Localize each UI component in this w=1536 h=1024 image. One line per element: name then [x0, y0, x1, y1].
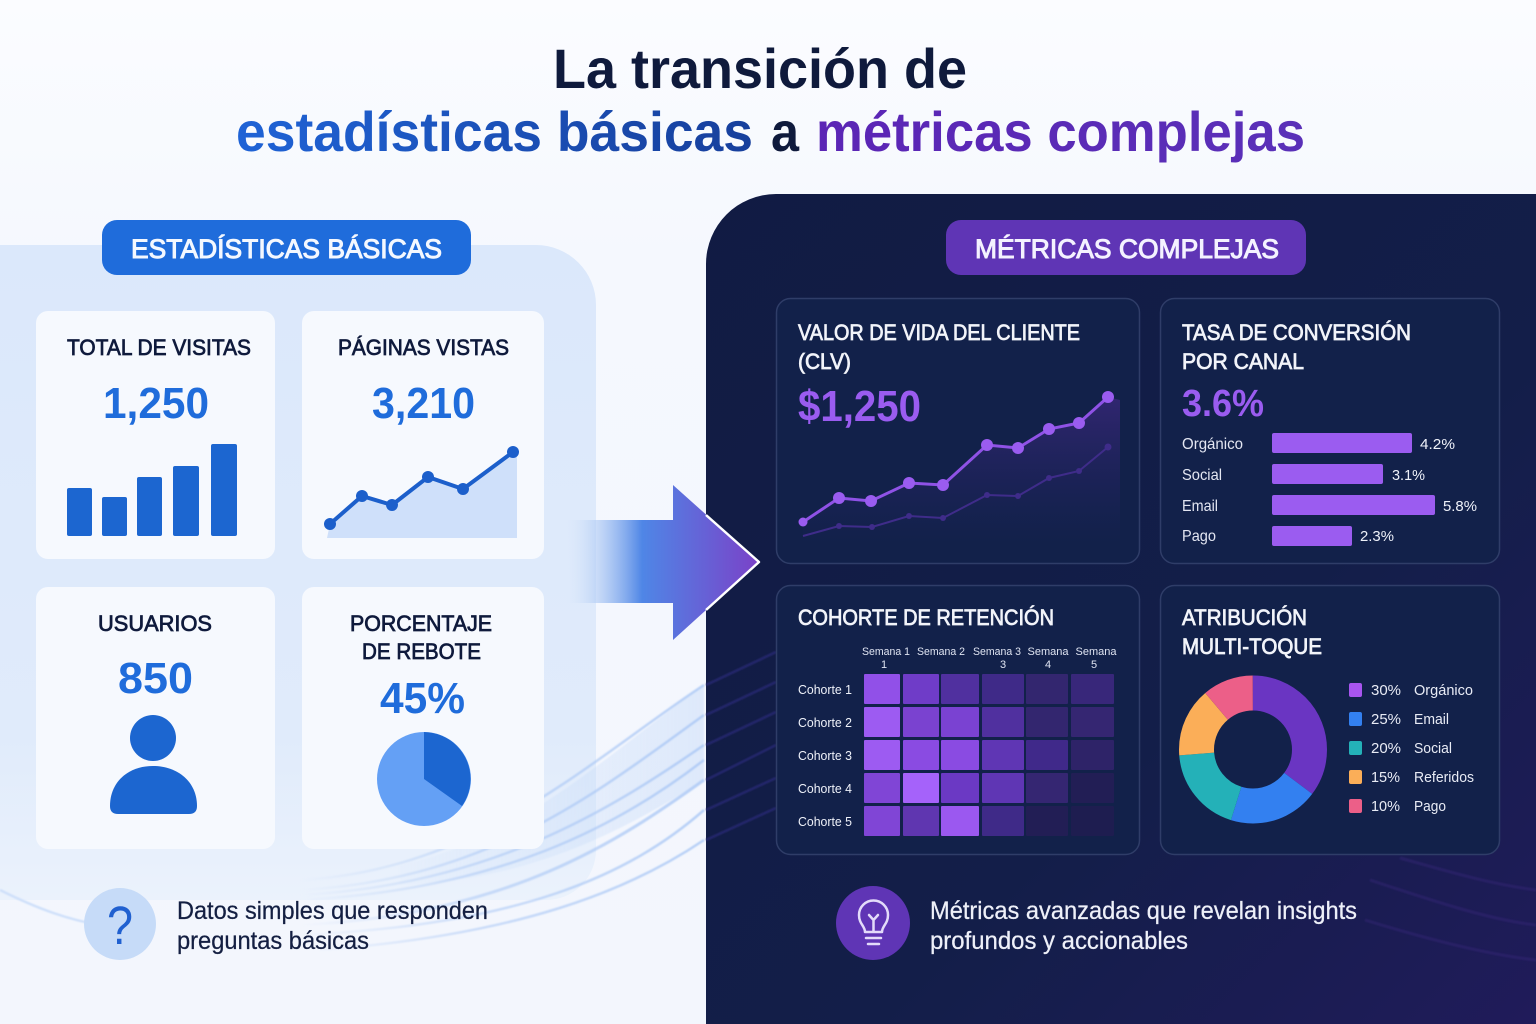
arrow: [565, 485, 759, 640]
text: complex metrics caption: Métricas avanzadas que revelan insights: [930, 897, 1357, 925]
horizontal bar chart: Email: [1182, 498, 1218, 515]
text: basic statistics caption: [177, 897, 488, 955]
value: 3.6%: [1182, 383, 1264, 425]
heatmap row labels: [798, 682, 852, 829]
heatmap column labels: Semana 3: [973, 646, 1021, 658]
decorative waves: [0, 652, 1536, 960]
card heading: TASA DE CONVERSIÓN: [1182, 320, 1411, 345]
text: basic statistics caption: Datos simples que responden: [177, 897, 488, 925]
card heading: COHORTE DE RETENCIÓN: [798, 605, 1054, 630]
legend: Email: [1414, 711, 1449, 728]
heatmap column labels: 4: [1045, 659, 1051, 671]
heatmap column labels: 3: [1000, 659, 1006, 671]
legend: 15%: [1371, 769, 1400, 786]
legend: Referidos: [1414, 769, 1474, 786]
horizontal bar chart: [1182, 433, 1477, 546]
card: usuarios: [36, 587, 275, 849]
legend: [1349, 682, 1474, 815]
card: páginas vistas: [302, 311, 544, 559]
primary line: [798, 391, 1114, 526]
card heading: ATRIBUCIÓN: [1182, 605, 1307, 630]
text: complex metrics caption: [930, 897, 1357, 955]
heatmap column labels: Semana: [1028, 646, 1069, 658]
text: complex metrics caption: profundos y accionables: [930, 927, 1188, 955]
legend: 10%: [1371, 798, 1400, 815]
legend: Orgánico: [1414, 682, 1473, 699]
card heading: POR CANAL: [1182, 349, 1304, 374]
title: La transición de: [553, 37, 967, 100]
card: cohorte de retención: [776, 586, 1140, 854]
title: estadísticas básicas: [236, 100, 753, 163]
value: $1,250: [798, 382, 921, 431]
horizontal bar chart: Orgánico: [1182, 436, 1243, 453]
line chart: [324, 446, 519, 538]
legend: 25%: [1371, 711, 1401, 728]
arrow highlight: [706, 515, 759, 610]
title: a: [771, 100, 800, 163]
value: 850: [118, 654, 193, 703]
card heading: PORCENTAJE: [350, 611, 492, 636]
card heading: MULTI-TOQUE: [1182, 634, 1322, 659]
card: porcentaje de rebote: [302, 587, 544, 849]
heatmap cells: [864, 674, 1114, 836]
heatmap column labels: Semana 1: [862, 646, 910, 658]
horizontal bar chart: Pago: [1182, 528, 1216, 545]
bar chart: [67, 444, 237, 536]
donut chart: [1196, 693, 1310, 806]
badge: métricas complejas: [946, 220, 1306, 275]
legend: Social: [1414, 740, 1452, 757]
heatmap column labels: 5: [1091, 659, 1097, 671]
card heading: TOTAL DE VISITAS: [67, 335, 251, 360]
panel: basic statistics background: [0, 245, 596, 900]
value: 3,210: [372, 379, 475, 428]
card heading: [350, 611, 492, 664]
pie chart: [377, 732, 471, 826]
heatmap row labels: Cohorte 5: [798, 814, 852, 829]
card heading: [1182, 605, 1322, 659]
heatmap row labels: Cohorte 1: [798, 682, 852, 697]
card heading: [1182, 320, 1411, 374]
horizontal bar chart: 5.8%: [1443, 498, 1477, 515]
legend: Pago: [1414, 798, 1446, 815]
horizontal bar chart: 3.1%: [1392, 467, 1425, 484]
icon: question mark: [84, 888, 156, 960]
icon: light bulb: [836, 886, 910, 960]
title: métricas complejas: [816, 100, 1305, 163]
secondary line: [803, 444, 1112, 536]
icon: user: [110, 715, 197, 814]
value: 1,250: [103, 379, 209, 428]
horizontal bar chart: 4.2%: [1420, 436, 1455, 453]
card: valor de vida del cliente: [776, 298, 1140, 564]
legend: 30%: [1371, 682, 1401, 699]
badge: estadísticas básicas: ESTADÍSTICAS BÁSICAS: [131, 234, 442, 264]
card heading: VALOR DE VIDA DEL CLIENTE: [798, 320, 1080, 345]
card: atribución multi-toque: [1160, 586, 1500, 854]
horizontal bar chart: 2.3%: [1360, 528, 1394, 545]
card: total de visitas: [36, 311, 275, 559]
card heading: PÁGINAS VISTAS: [338, 335, 509, 360]
title: [236, 37, 1305, 163]
area line chart: [798, 391, 1120, 545]
panel: complex metrics background: [706, 194, 1536, 1024]
heatmap column labels: Semana: [1076, 646, 1117, 658]
value: 45%: [380, 674, 465, 723]
horizontal bar chart: Social: [1182, 467, 1222, 484]
heatmap row labels: Cohorte 3: [798, 748, 852, 763]
card: tasa de conversión por canal: [1160, 298, 1500, 564]
card heading: USUARIOS: [98, 611, 212, 636]
heatmap column labels: [862, 646, 1117, 671]
card heading: [798, 320, 1080, 374]
card heading: (CLV): [798, 349, 851, 374]
heatmap column labels: Semana 2: [917, 646, 965, 658]
heatmap row labels: Cohorte 2: [798, 715, 852, 730]
legend: 20%: [1371, 740, 1401, 757]
heatmap column labels: 1: [881, 659, 887, 671]
icon: question mark: ?: [107, 896, 133, 956]
badge: estadísticas básicas: [102, 220, 471, 275]
heatmap row labels: Cohorte 4: [798, 781, 852, 796]
card heading: DE REBOTE: [362, 639, 481, 664]
badge: métricas complejas: MÉTRICAS COMPLEJAS: [975, 234, 1279, 264]
text: basic statistics caption: preguntas básicas: [177, 927, 369, 955]
